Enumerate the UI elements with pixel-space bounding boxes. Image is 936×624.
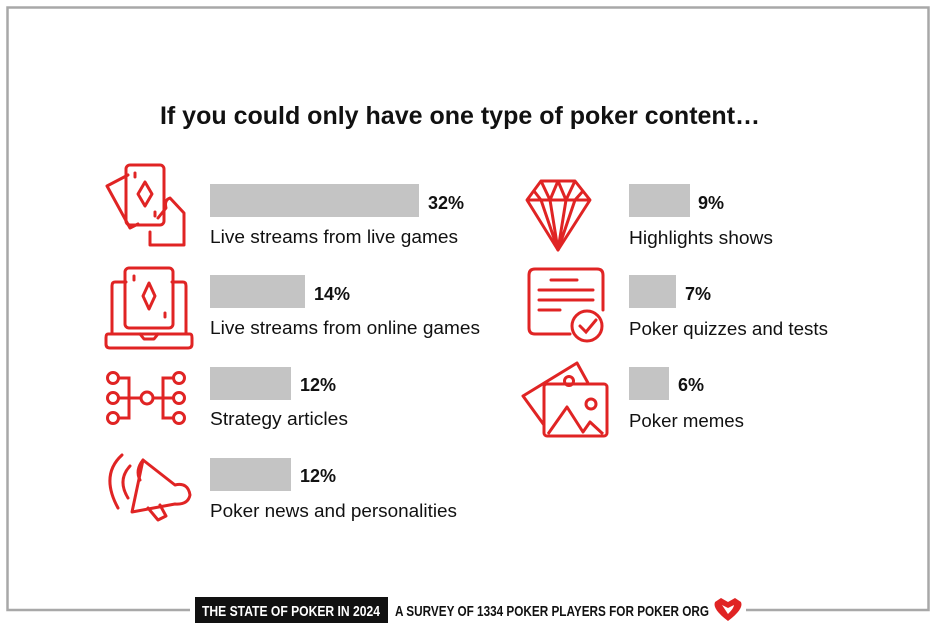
labels xyxy=(210,193,828,521)
icon: diamond xyxy=(527,181,590,250)
icon: laptop card xyxy=(106,268,192,348)
footer: THE STATE OF POKER IN 2024 xyxy=(202,603,381,620)
labels: Live streams from online games xyxy=(210,318,480,338)
labels: Poker memes xyxy=(629,411,744,431)
footer: A SURVEY OF 1334 POKER PLAYERS FOR POKER ORG xyxy=(395,603,709,620)
labels: 6% xyxy=(678,375,704,395)
labels: 7% xyxy=(685,284,711,304)
icon: cards in hand xyxy=(107,165,184,245)
icon: megaphone xyxy=(110,455,190,520)
labels: 14% xyxy=(314,284,350,304)
icon: quiz xyxy=(529,269,603,341)
bars xyxy=(210,184,690,491)
labels: 9% xyxy=(698,193,724,213)
labels: Poker quizzes and tests xyxy=(629,319,828,339)
icon: strategy tree xyxy=(108,372,184,424)
labels: 12% xyxy=(300,466,336,486)
labels: Poker news and personalities xyxy=(210,501,457,521)
labels: 12% xyxy=(300,375,336,395)
icon: memes xyxy=(523,363,607,436)
labels: Highlights shows xyxy=(629,228,773,248)
labels: Live streams from live games xyxy=(210,227,458,247)
title: If you could only have one type of poker content… xyxy=(160,102,760,130)
labels: 32% xyxy=(428,193,464,213)
footer xyxy=(195,597,741,623)
labels: Strategy articles xyxy=(210,409,348,429)
